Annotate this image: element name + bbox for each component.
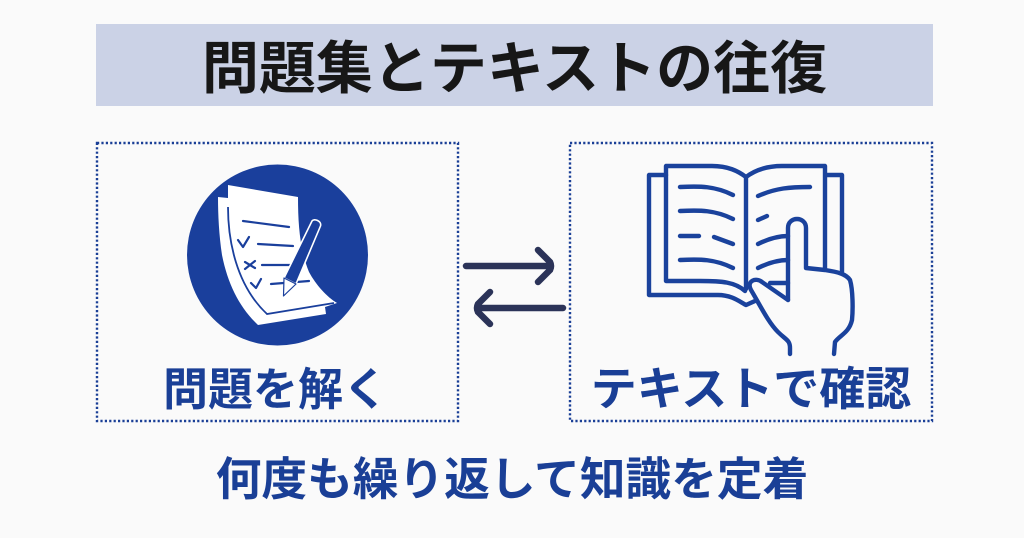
arrows: back and forth bbox=[466, 250, 563, 324]
panel: solve problems bbox=[97, 143, 458, 421]
icon: worksheet and pencil bbox=[187, 164, 368, 346]
title banner bbox=[96, 24, 933, 106]
label: solve problems: 問題を解く bbox=[163, 364, 388, 415]
icon: pencil bbox=[284, 220, 321, 296]
icon: open book with pointing hand bbox=[649, 166, 853, 354]
label: check the textbook: テキストで確認 bbox=[591, 363, 911, 415]
panel: check the textbook bbox=[570, 143, 932, 421]
conclusion text: 何度も繰り返して知識を定着 bbox=[216, 454, 808, 505]
title banner: 問題集とテキストの往復 bbox=[202, 37, 827, 101]
